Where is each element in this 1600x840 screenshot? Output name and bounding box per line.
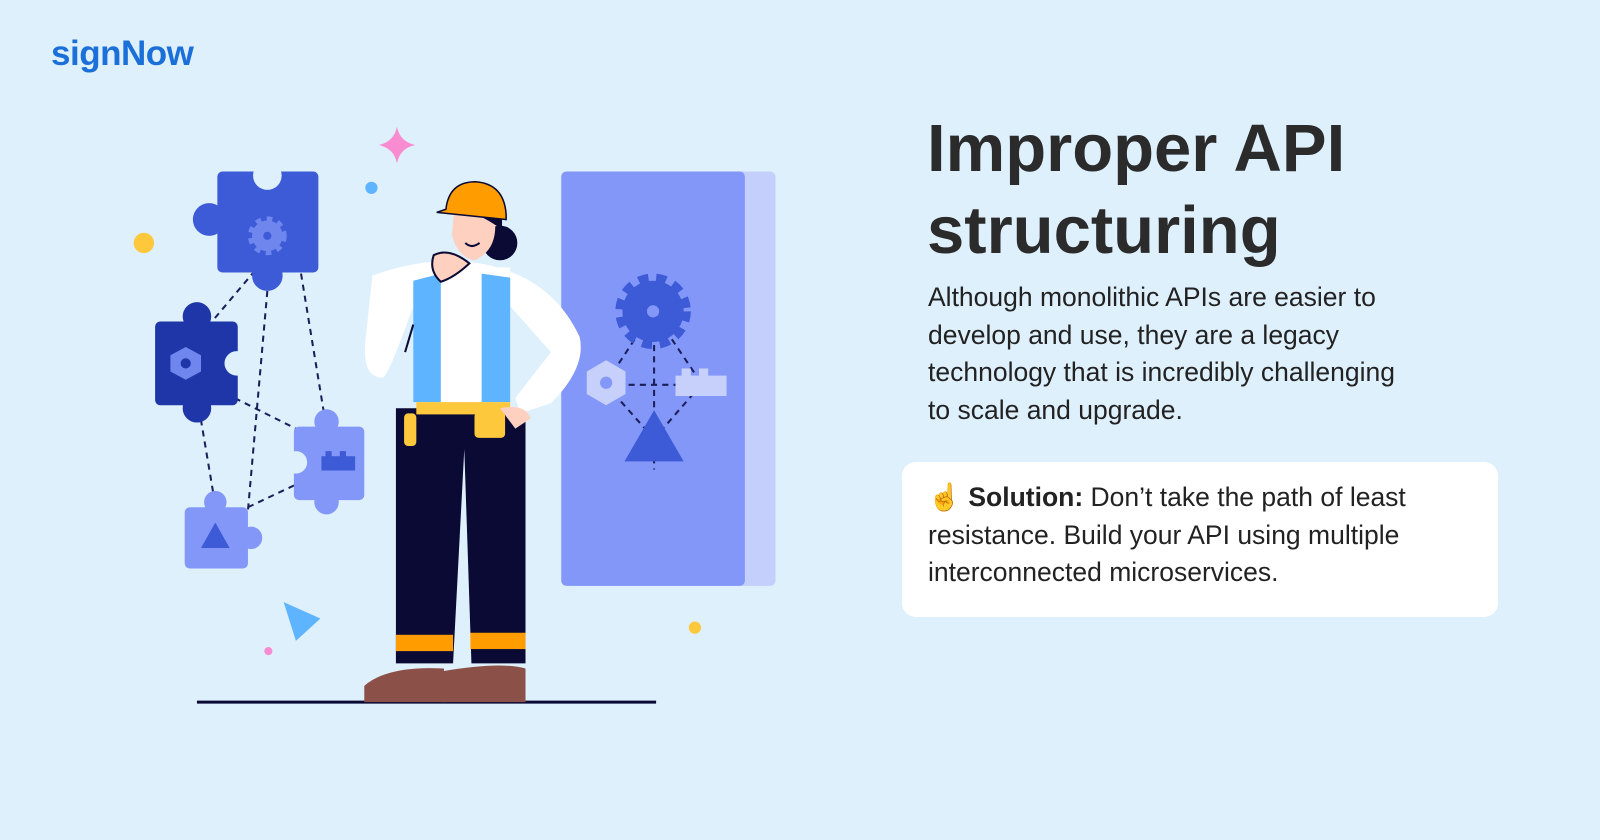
title: structuring (927, 193, 1281, 268)
logo: signNow (51, 34, 193, 73)
decorations (134, 127, 701, 702)
title (927, 111, 1345, 268)
person (364, 182, 581, 702)
panel: back board (561, 172, 776, 586)
dashed network lines (199, 271, 327, 510)
title: Improper API (927, 111, 1345, 186)
solution callout (902, 462, 1498, 617)
body text: Although monolithic APIs are easier to develop and use, they are a legacy technology that is incredibly challenging to scale and upgrade. (928, 282, 1395, 424)
puzzle pieces (155, 161, 364, 568)
solution callout: ☝ Solution: Don’t take the path of least resistance. Build your API using multiple interconnected microservices. (928, 482, 1406, 587)
